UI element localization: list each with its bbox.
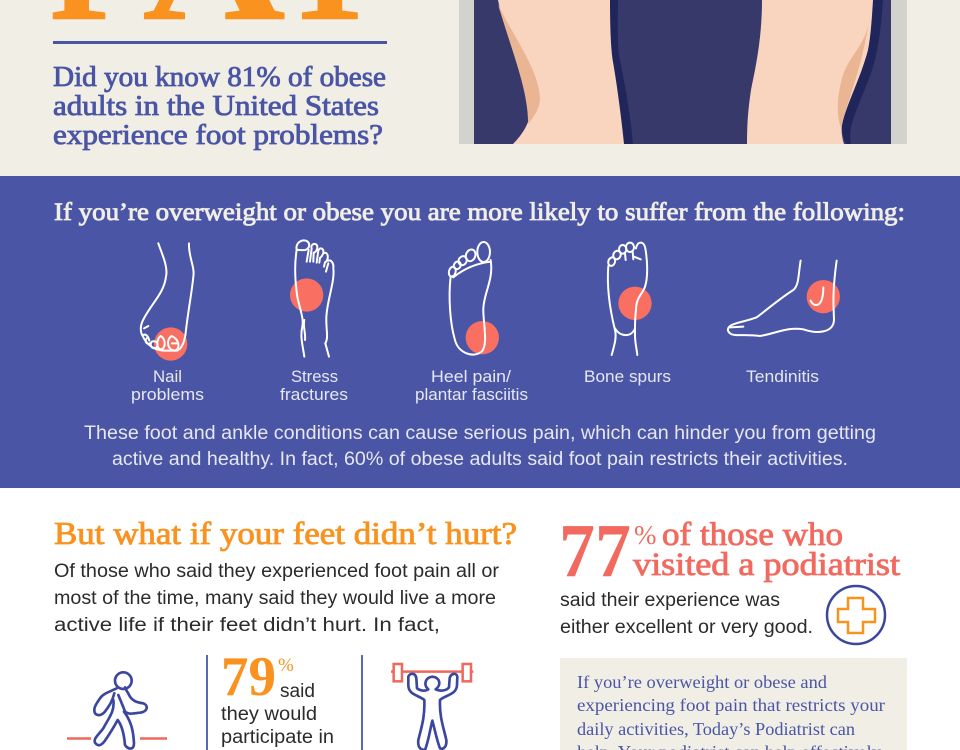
icon: stress fractures (290, 240, 334, 357)
intro question: Did you know 81% of obese (53, 61, 386, 93)
icon: weightlifter (391, 664, 473, 750)
heading: what if: But what if your feet didn’t hurt? (54, 515, 517, 551)
stat: 79 percent: said (280, 681, 315, 702)
callout: today's podiatrist: If you’re overweight or obese and (577, 672, 827, 692)
panel: conditions (0, 176, 960, 488)
condition labels: Tendinitis (746, 368, 819, 386)
condition labels (131, 368, 819, 404)
icon: bone spurs (607, 243, 652, 355)
stat: 79 percent: 79 (221, 646, 276, 708)
illustration: legs (459, 0, 907, 144)
callout: today's podiatrist: experiencing foot pain that restricts your (577, 695, 885, 715)
title (50, 0, 380, 52)
conditions heading: If you’re overweight or obese you are more likely to suffer from the following: (54, 199, 905, 226)
condition labels: Nail (153, 368, 182, 386)
condition labels: plantar fasciitis (415, 386, 528, 404)
stat: 79 percent: participate in (221, 727, 334, 748)
text: podiatrist experience: said their experience was (560, 590, 780, 611)
stat: 79 percent: they would (221, 704, 317, 725)
conditions paragraph (84, 423, 876, 470)
conditions paragraph: These foot and ankle conditions can cause serious pain, which can hinder you from getting (84, 423, 876, 444)
stat: 77 percent: visited a podiatrist (633, 547, 900, 583)
text: podiatrist experience (560, 590, 813, 638)
callout: today's podiatrist: daily activities, Today’s Podiatrist can (577, 719, 855, 739)
icon: heel pain (448, 242, 499, 355)
intro question: experience foot problems? (53, 119, 383, 151)
icon: nail problems (141, 243, 194, 361)
stat: 77 percent: % (634, 520, 656, 550)
condition labels: Stress (291, 368, 338, 386)
divider lines (207, 655, 362, 750)
text: foot pain summary: most of the time, many said they would live a more (54, 588, 496, 609)
icon: walking person (67, 672, 167, 749)
text: foot pain summary: Of those who said they experienced foot pain all or (54, 561, 500, 582)
stat: 79 percent (221, 646, 334, 748)
condition labels: Heel pain/ (431, 368, 511, 386)
condition labels: problems (131, 386, 204, 404)
intro question (53, 61, 386, 151)
condition labels: fractures (280, 386, 348, 404)
callout: today's podiatrist (560, 658, 907, 750)
text: podiatrist experience: either excellent or very good. (560, 617, 813, 638)
stat: 79 percent: % (278, 655, 294, 676)
stat: 77 percent: of those who (662, 517, 843, 553)
icon: tendinitis (728, 261, 840, 336)
stat: 77 percent (559, 509, 900, 593)
panel: top intro (0, 0, 960, 176)
text: foot pain summary (54, 561, 500, 636)
icon: medical cross (827, 586, 885, 644)
stat: 77 percent: 77 (559, 509, 631, 593)
condition labels: Bone spurs (584, 368, 671, 386)
intro question: adults in the United States (53, 90, 379, 122)
text: foot pain summary: active life if their feet didn’t hurt. In fact, (54, 615, 440, 636)
conditions paragraph: active and healthy. In fact, 60% of obese adults said foot pain restricts their activities. (112, 449, 848, 470)
